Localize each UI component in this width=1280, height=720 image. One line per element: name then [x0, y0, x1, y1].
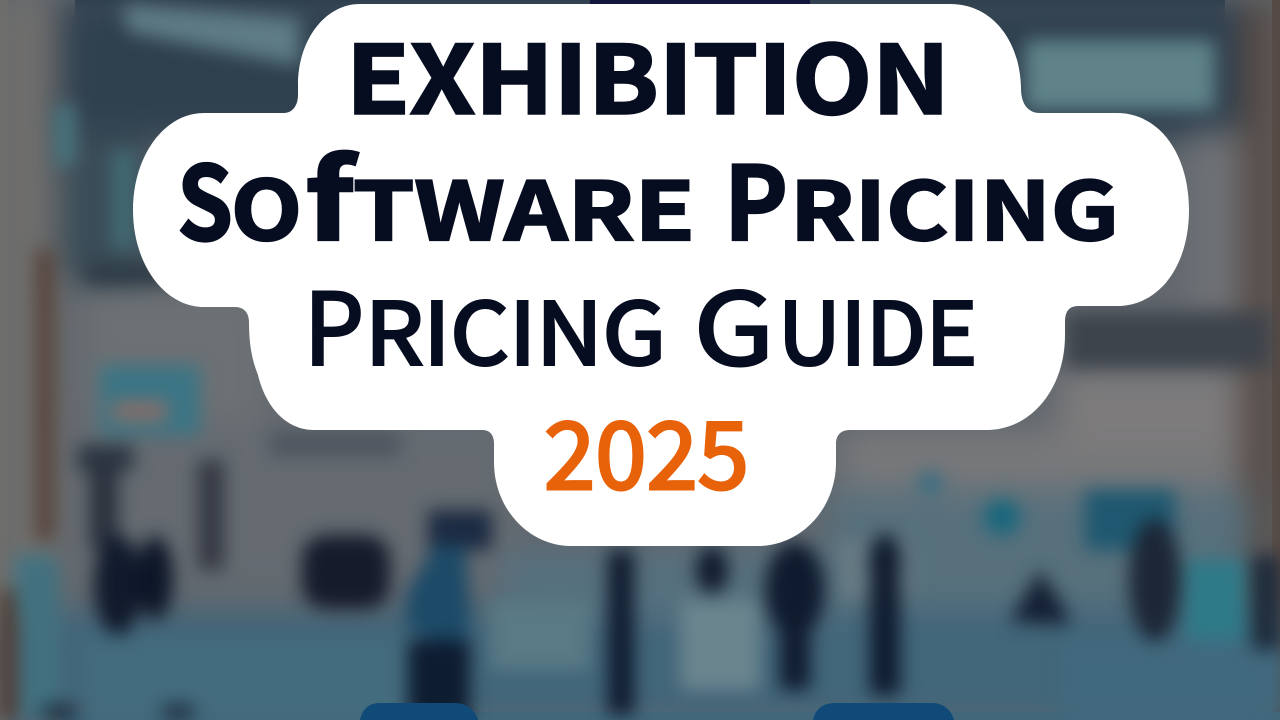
title line: Pricing Guide: RICING [365, 264, 666, 390]
white title panel [133, 4, 1189, 546]
counters [85, 640, 405, 720]
title line: Pricing Guide: P [304, 250, 364, 394]
booths and dark verticals [36, 250, 54, 540]
year 2025: 2025 [544, 381, 749, 516]
bottom right blue tab [813, 703, 954, 720]
top edge dark strip [590, 0, 810, 4]
title line: Software Pricing [177, 112, 1119, 272]
title line: Software Pricing: O [231, 145, 302, 264]
title line: Software Pricing: RICING [790, 148, 1119, 264]
ceiling streaks [122, 4, 300, 66]
title line: Software Pricing: TWARE [353, 148, 695, 264]
title line: Software Pricing: S [177, 123, 233, 270]
title line: Software Pricing: P [724, 123, 788, 270]
title line: Pricing Guide [304, 250, 977, 394]
title line: Pricing Guide: G [694, 250, 774, 394]
title line: Software Pricing: f [305, 112, 359, 272]
bottom left blue tab [360, 703, 478, 720]
people silhouettes [94, 535, 142, 635]
title line: Pricing Guide: UIDE [778, 264, 977, 390]
title line: EXHIBITION: EXHIBITION [346, 6, 950, 142]
